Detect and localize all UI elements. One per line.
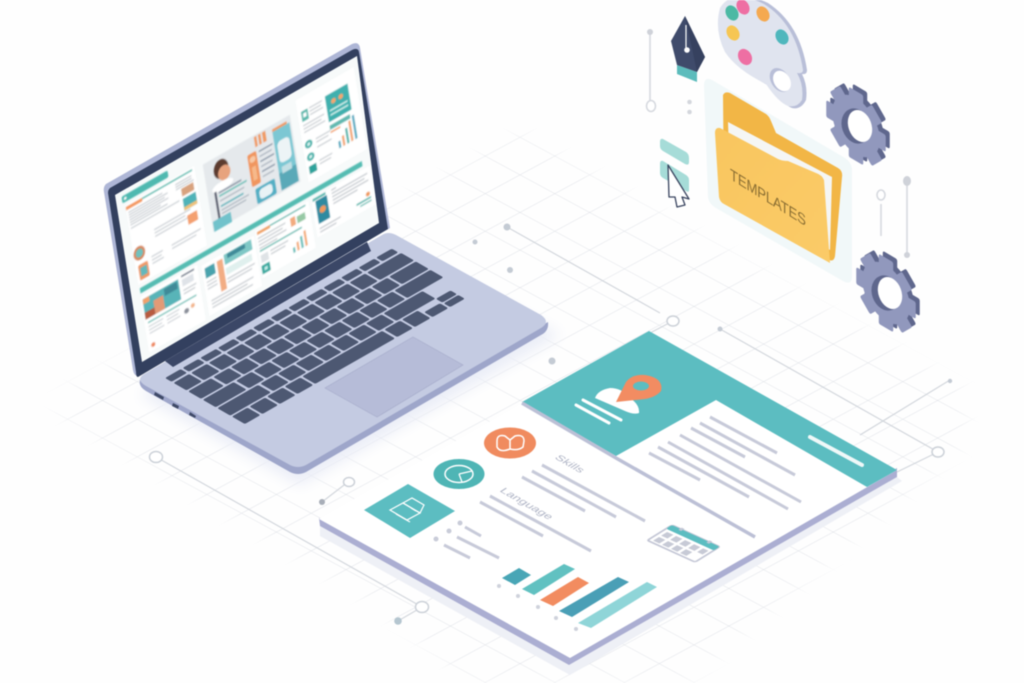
language text lines xyxy=(480,496,591,551)
laptop xyxy=(104,43,560,485)
keyboard xyxy=(165,248,473,424)
palette icon xyxy=(718,0,807,108)
bullet list xyxy=(434,520,499,558)
folder xyxy=(704,79,852,283)
teal buttons xyxy=(660,139,689,192)
laptop base top xyxy=(140,233,546,467)
top left page xyxy=(121,156,207,286)
bar chart xyxy=(497,564,657,631)
skills text lines xyxy=(522,465,645,521)
folder front xyxy=(715,128,830,263)
pen nib icon xyxy=(671,16,705,82)
header right bar xyxy=(810,437,862,465)
bottom page one xyxy=(140,265,206,352)
header text lines xyxy=(576,400,621,423)
folder label: TEMPLATES xyxy=(730,166,806,230)
teal square icon xyxy=(364,484,455,538)
folder paper xyxy=(728,122,832,250)
upper gear icon xyxy=(826,70,890,178)
slider lines right xyxy=(877,176,911,258)
resume document xyxy=(319,331,902,675)
Language label: Language xyxy=(497,486,556,521)
hinge xyxy=(165,242,371,367)
orange circle icon xyxy=(484,428,536,458)
bottom page two xyxy=(201,236,262,316)
small dots xyxy=(687,100,692,114)
screen bezel xyxy=(108,49,388,377)
bottom page three xyxy=(255,201,316,278)
central teal band xyxy=(140,161,363,293)
background isometric grid xyxy=(68,136,962,682)
laptop screen with template pages xyxy=(115,56,379,362)
teal header xyxy=(522,331,897,487)
document edge xyxy=(319,468,897,665)
top right page xyxy=(296,67,367,182)
teal circle icon xyxy=(434,459,484,489)
cursor arrow xyxy=(668,165,689,207)
body text lines xyxy=(649,417,801,509)
Skills label: Skills xyxy=(552,453,588,475)
trackpad xyxy=(325,337,463,417)
side ports xyxy=(154,392,196,418)
location pin and cloud icon xyxy=(595,375,661,414)
centre profile page xyxy=(203,115,301,232)
grey divider line xyxy=(522,403,755,537)
bottom page four xyxy=(311,166,376,238)
lower gear icon xyxy=(856,238,920,346)
slider line left xyxy=(646,29,656,112)
laptop shadow xyxy=(140,245,560,485)
document sheet xyxy=(319,331,897,658)
laptop base side xyxy=(140,322,548,474)
grid nodes and connectors xyxy=(150,224,952,625)
folder glass backing xyxy=(704,79,852,283)
folder back xyxy=(723,92,842,260)
screen lid outer edge xyxy=(104,43,390,376)
document ground band xyxy=(320,477,902,675)
calendar icon xyxy=(647,524,721,562)
